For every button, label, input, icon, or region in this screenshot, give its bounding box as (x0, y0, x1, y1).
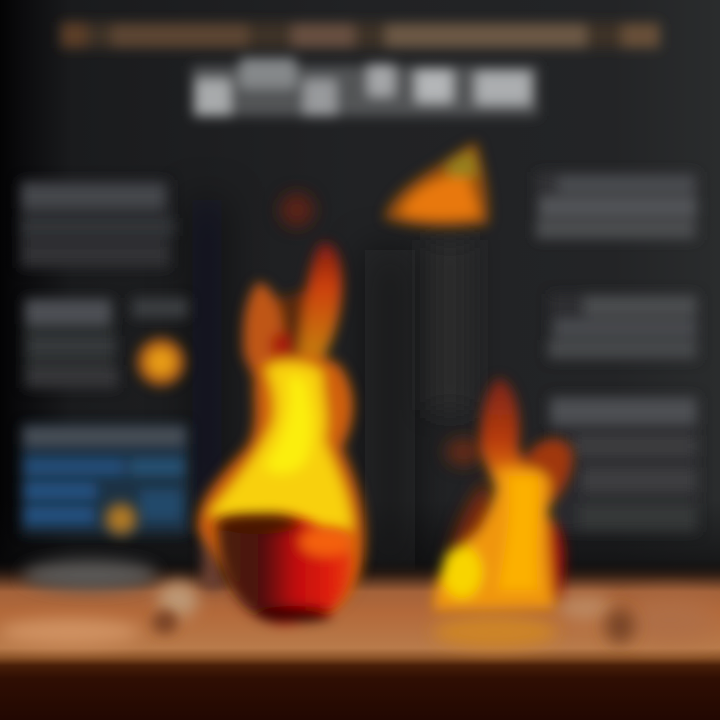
title: orange line (60, 22, 660, 48)
flame red fork (270, 332, 292, 358)
small flame yellow patch (442, 546, 482, 598)
icon: red bowl (216, 514, 352, 624)
icon: small orange dot (104, 502, 138, 536)
panel: left text block 1 (20, 180, 174, 268)
small flame red top (480, 378, 530, 484)
flame prong gap fill (272, 290, 308, 360)
panel: left text block 2 with orange icon (24, 298, 188, 388)
small flame left bump (446, 438, 482, 466)
illustration: large flame (198, 193, 365, 624)
panel: left blue block (22, 424, 188, 536)
illustration: small flame (433, 378, 573, 648)
item: pale crumb (158, 582, 198, 618)
table left highlight (0, 619, 140, 645)
flame left prong (243, 282, 292, 395)
table surface and front shadow (0, 560, 720, 720)
panel: right text block 3 (550, 396, 698, 532)
bowl left haze (202, 530, 224, 590)
lighter vertical panel stripe (428, 240, 472, 410)
small flame base glow on table (433, 616, 557, 648)
small flame dark red right edge (536, 515, 564, 600)
lower wall shade above the table (0, 500, 720, 585)
table right highlight (624, 600, 716, 640)
small flame amber body (434, 467, 554, 610)
scattered items on table (22, 560, 635, 644)
flame right prong (298, 243, 342, 368)
icon: orange flame dot (137, 338, 185, 386)
panel: right text block 1 (536, 172, 698, 240)
small flame dark red left halo (450, 480, 500, 560)
small flame golden column (498, 476, 538, 590)
flame tip ember (280, 193, 314, 227)
item: dark crumb left (152, 610, 178, 634)
flame yellow body (208, 362, 352, 530)
flame bright core (264, 376, 312, 474)
dark shadow bands behind the flames (190, 200, 415, 570)
small flame body group (434, 378, 573, 610)
item: dark crumb right (605, 608, 635, 644)
bowl rim shadow (216, 514, 300, 534)
flame body group (198, 243, 365, 612)
panel: right text block 2 (548, 294, 698, 360)
small flame right branch (520, 439, 573, 508)
bowl bottom shadow (256, 606, 332, 622)
item: pale crumb right (558, 596, 614, 620)
flame outer orange body (198, 355, 365, 612)
title: white line (192, 58, 538, 116)
item: grey plate (22, 560, 158, 590)
icon: top orange flame triangle (384, 142, 488, 227)
bowl orange highlight (300, 528, 352, 556)
